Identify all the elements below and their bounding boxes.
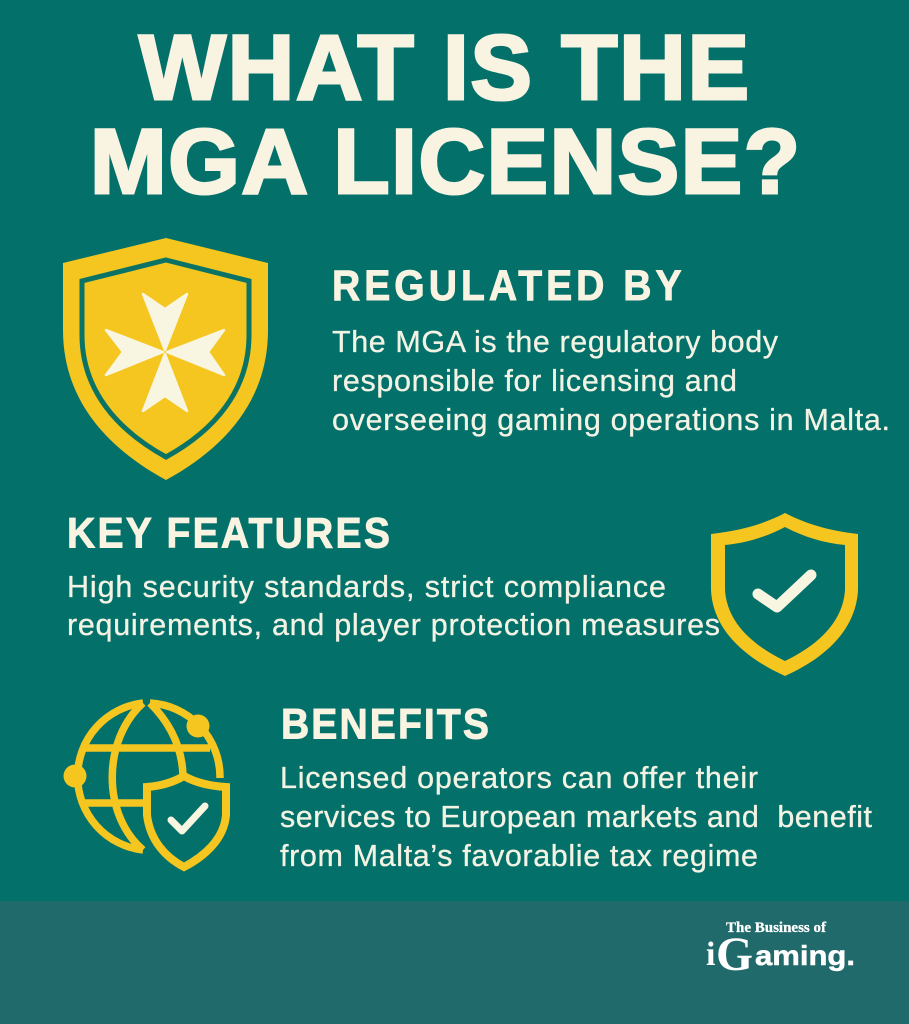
icon: check shield [711, 513, 858, 676]
icon: Maltese cross shield [63, 238, 268, 480]
text block: benefits: from Malta’s favorablie tax regime [280, 839, 758, 873]
section: benefits [280, 700, 873, 873]
text block: key features: requirements, and player protection measures [67, 608, 720, 642]
logo: The Business of iGaming [706, 920, 855, 981]
logo: The Business of iGaming: i [706, 936, 715, 973]
title: MGA LICENSE? [90, 111, 800, 213]
text block: benefits [280, 761, 873, 873]
text block: regulated by: overseeing gaming operations in Malta. [332, 403, 890, 437]
heading: key features: KEY FEATURES [67, 509, 390, 557]
text block: regulated by [332, 325, 890, 437]
heading: regulated by: REGULATED BY [332, 261, 682, 309]
text block: benefits: Licensed operators can offer their [280, 761, 758, 795]
heading: benefits: BENEFITS [281, 700, 489, 748]
logo: The Business of iGaming: aming. [755, 940, 855, 971]
text block: regulated by: The MGA is the regulatory body [332, 325, 779, 359]
text block: key features: High security standards, strict compliance [67, 570, 666, 604]
text block: benefits: services to European markets and benefit [280, 800, 873, 834]
footer band [0, 901, 909, 1024]
logo: The Business of iGaming: G [716, 928, 753, 981]
section: key features [67, 509, 720, 642]
icon: globe with shield [64, 703, 226, 867]
title: WHAT IS THE [139, 17, 749, 119]
title [90, 17, 800, 213]
section: regulated by [332, 261, 890, 437]
logo: The Business of iGaming: The Business of [726, 920, 827, 936]
text block: regulated by: responsible for licensing and [332, 364, 737, 398]
text block: key features [67, 570, 720, 642]
